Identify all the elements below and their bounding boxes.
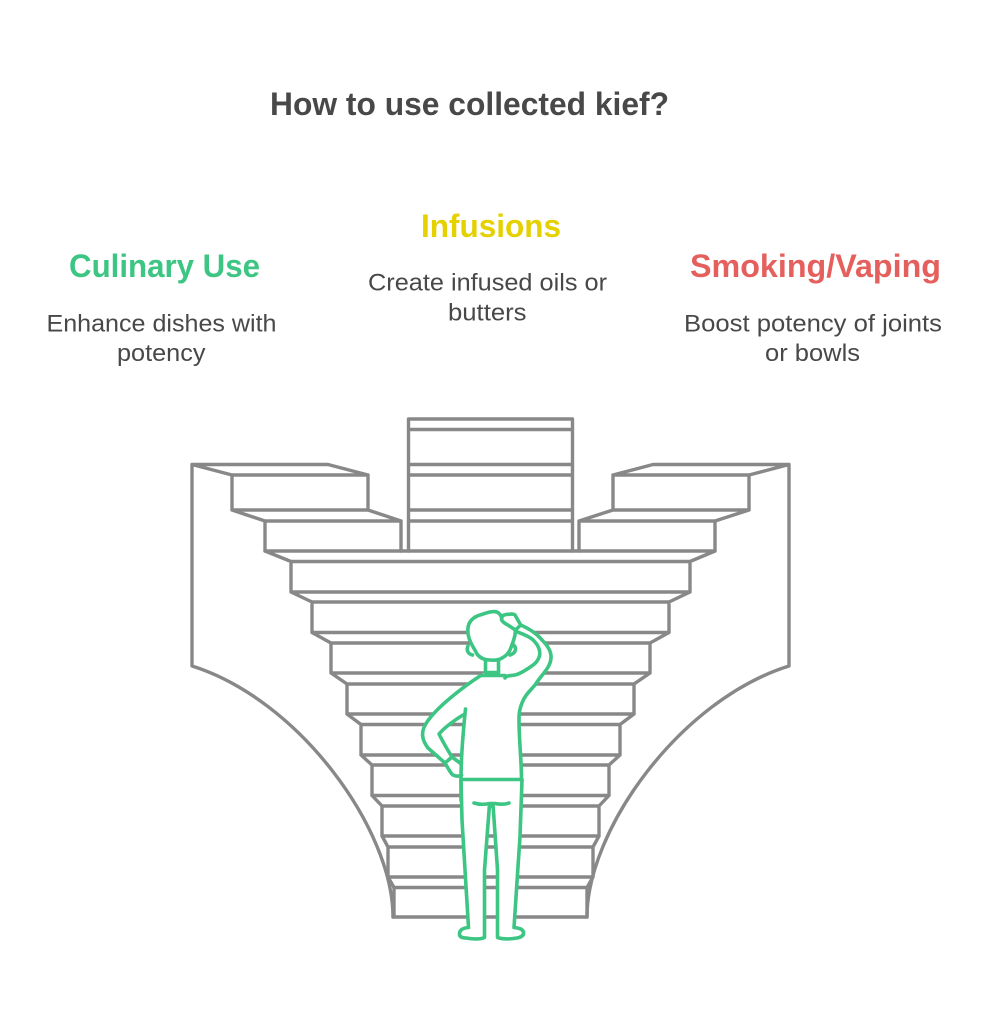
person silhouette fill xyxy=(423,613,552,939)
chart: branching staircase xyxy=(192,419,789,917)
person back and hip arm xyxy=(423,676,480,800)
title: How to use collected kief? xyxy=(270,86,669,122)
text: infusions description: butters xyxy=(448,300,526,326)
person neck, collar and ears xyxy=(467,645,516,676)
main stair steps xyxy=(265,551,715,917)
person raised arm xyxy=(505,625,551,780)
text: smoking/vaping description: Boost potency of joints xyxy=(684,310,942,338)
person waistband seam xyxy=(474,803,509,804)
right stair branch xyxy=(579,464,789,917)
heading: smoking/vaping: Smoking/Vaping xyxy=(690,248,941,284)
panel: smoking/vaping xyxy=(684,248,942,367)
text: smoking/vaping description xyxy=(684,310,942,367)
person waist line xyxy=(461,778,522,781)
panel: culinary use xyxy=(46,248,276,367)
person raised hand xyxy=(502,614,521,630)
central upper stairs xyxy=(408,419,572,551)
heading: infusions: Infusions xyxy=(421,208,561,244)
left stair branch xyxy=(192,464,401,917)
text: culinary use description: potency xyxy=(117,340,206,367)
panel: infusions xyxy=(368,208,607,326)
text: infusions description xyxy=(368,270,607,326)
text: culinary use description: Enhance dishes with xyxy=(46,310,276,338)
text: infusions description: Create infused oils or xyxy=(368,270,607,296)
person legs and feet xyxy=(460,780,524,939)
heading: culinary use: Culinary Use xyxy=(69,248,260,284)
text: smoking/vaping description: or bowls xyxy=(765,340,860,367)
text: culinary use description xyxy=(46,310,276,367)
person head outline xyxy=(468,612,516,660)
icon: person scratching head xyxy=(423,612,552,939)
